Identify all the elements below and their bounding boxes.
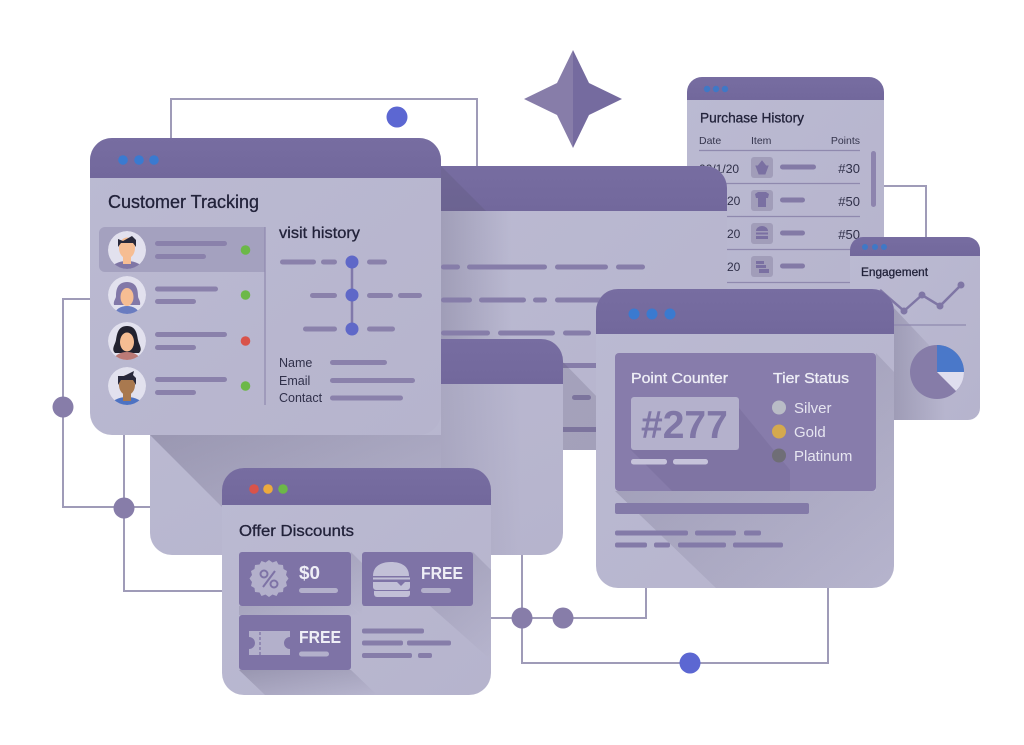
status dots bbox=[241, 245, 250, 391]
star icon bbox=[524, 50, 622, 148]
table rows: #50 bbox=[838, 227, 860, 242]
row text bars bbox=[155, 241, 227, 395]
tier legend bbox=[772, 400, 852, 465]
tier legend: Gold bbox=[794, 424, 826, 441]
table rows bbox=[699, 150, 876, 282]
table rows: 00/1/20 bbox=[699, 162, 739, 176]
card: burger bbox=[362, 552, 473, 606]
window dots bbox=[249, 484, 288, 494]
text lines bbox=[362, 628, 451, 658]
text bars bbox=[615, 503, 809, 548]
contact fields: Email bbox=[279, 374, 310, 388]
contact fields bbox=[279, 356, 415, 405]
avatar: man dark skin bbox=[108, 367, 146, 405]
table rows: 20 bbox=[727, 260, 741, 274]
heading: engagement: Engagement bbox=[861, 265, 929, 279]
panel: counter box bbox=[615, 353, 876, 491]
table rows: 20 bbox=[727, 227, 741, 241]
panel: engagement bbox=[850, 237, 980, 420]
card: ticket: FREE bbox=[299, 627, 341, 647]
panel: offer discounts bbox=[222, 468, 491, 695]
scrollbar bbox=[871, 151, 876, 207]
table rows: #30 bbox=[838, 161, 860, 176]
tier legend: Platinum bbox=[794, 448, 852, 465]
card: percent: $0 bbox=[299, 563, 320, 583]
window dots bbox=[628, 308, 676, 320]
pie chart bbox=[910, 345, 964, 399]
shadow on engagement bbox=[894, 308, 945, 420]
connector lines bbox=[63, 99, 926, 663]
heading: offer discounts: Offer Discounts bbox=[239, 523, 354, 540]
table header: Points bbox=[831, 135, 860, 147]
text lines bbox=[441, 264, 645, 432]
heading: tier status: Tier Status bbox=[773, 371, 849, 387]
heading: point counter: Point Counter bbox=[631, 371, 728, 387]
panel: point counter bbox=[596, 289, 894, 588]
table header: Item bbox=[751, 135, 772, 147]
heading: visit history: visit history bbox=[279, 225, 360, 242]
panel: customer tracking bbox=[90, 138, 441, 435]
selected row bbox=[99, 227, 265, 272]
points value: #277 bbox=[641, 404, 728, 447]
avatar: woman grey hair bbox=[108, 276, 146, 314]
window dots bbox=[118, 155, 159, 165]
visit timeline bbox=[280, 256, 422, 336]
panel: purchase history bbox=[687, 77, 884, 310]
panel: lower back window bbox=[150, 339, 563, 555]
card: burger: FREE bbox=[421, 563, 463, 583]
node: blue top bbox=[386, 106, 408, 128]
avatar: woman dark hair bbox=[108, 322, 146, 360]
long shadow bbox=[615, 353, 894, 588]
avatar: man bbox=[108, 231, 146, 269]
tier legend: Silver bbox=[794, 400, 832, 417]
table header bbox=[699, 135, 860, 147]
heading: customer tracking: Customer Tracking bbox=[108, 192, 259, 212]
heading: purchase history: Purchase History bbox=[700, 110, 804, 126]
panel: center back window bbox=[430, 166, 727, 450]
points value bbox=[631, 397, 739, 450]
line chart bbox=[880, 282, 966, 325]
table header: Date bbox=[699, 135, 721, 147]
table rows: #50 bbox=[838, 194, 860, 209]
nodes bbox=[52, 396, 700, 674]
card: ticket bbox=[239, 615, 351, 670]
contact fields: Name bbox=[279, 356, 312, 370]
card: percent bbox=[239, 552, 351, 606]
contact fields: Contact bbox=[279, 391, 323, 405]
card shadows bbox=[239, 552, 491, 695]
table rows: 20 bbox=[727, 194, 741, 208]
shadow bbox=[563, 362, 600, 450]
